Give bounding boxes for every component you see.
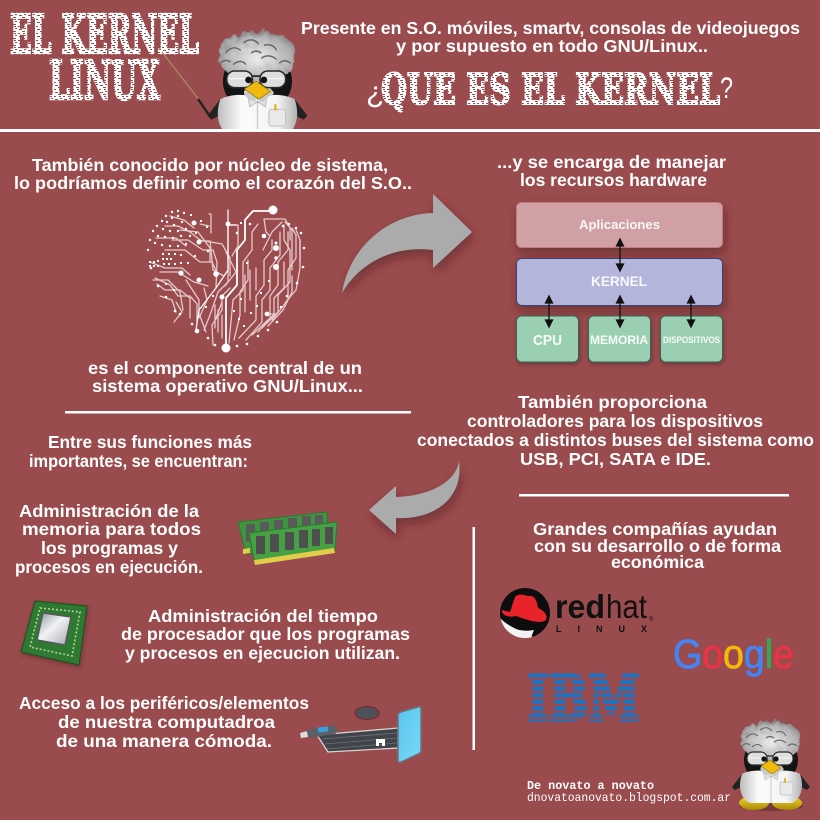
footer credit: De novato a novato bbox=[527, 779, 654, 793]
text: device drivers: También proporciona bbox=[518, 392, 707, 412]
box: aplicaciones: Aplicaciones bbox=[579, 217, 660, 232]
pointer stick bbox=[162, 52, 209, 115]
text: functions intro: importantes, se encuentran: bbox=[29, 451, 248, 471]
text: definition: También conocido por núcleo de sistema, bbox=[32, 155, 388, 175]
text: hardware: los recursos hardware bbox=[520, 170, 707, 190]
text: functions intro bbox=[29, 432, 252, 471]
text: device drivers bbox=[417, 392, 814, 469]
text: memory management bbox=[15, 501, 203, 577]
header: title bbox=[10, 4, 199, 112]
text: peripherals access: de nuestra computadroa bbox=[58, 712, 275, 732]
box: cpu: CPU bbox=[533, 332, 562, 349]
text: central component: es el componente central de un bbox=[88, 358, 362, 378]
text: peripherals access: de una manera cómoda. bbox=[56, 731, 272, 751]
text: processor time: y procesos en ejecucion utilizan. bbox=[125, 643, 400, 663]
icon: processor chip bbox=[21, 601, 87, 665]
logo: google: Google bbox=[673, 631, 794, 677]
box: dispositivos: DISPOSITIVOS bbox=[663, 335, 720, 345]
icon: footer penguin bbox=[732, 720, 810, 811]
text: central component: sistema operativo GNU/Linux... bbox=[92, 376, 363, 396]
text: device drivers: USB, PCI, SATA e IDE. bbox=[520, 449, 711, 469]
logo: red hat bbox=[500, 588, 654, 638]
icon: circuit heart bbox=[147, 206, 305, 352]
box: aplicaciones bbox=[516, 202, 722, 248]
text: processor time: de procesador que los programas bbox=[121, 624, 410, 644]
header intro text: y por supuesto en todo GNU/Linux.. bbox=[396, 36, 708, 56]
text: hardware bbox=[497, 152, 726, 190]
header intro text: Presente en S.O. móviles, smartv, consolas de videojuegos bbox=[301, 18, 800, 38]
text: processor time: Administración del tiempo bbox=[148, 606, 378, 626]
logo: red hat: hat bbox=[606, 588, 647, 625]
arrow: to functions bbox=[369, 461, 460, 534]
icon: teacher penguin bbox=[208, 28, 308, 129]
arrow: heart to hardware bbox=[342, 194, 472, 293]
logo: red hat: ® bbox=[649, 616, 654, 623]
text: memory management: memoria para todos bbox=[22, 519, 201, 539]
text: device drivers: controladores para los dispositivos bbox=[467, 411, 763, 431]
heading: que es el kernel: ¿ bbox=[366, 76, 384, 109]
text: memory management: Administración de la bbox=[19, 501, 199, 521]
box: kernel: KERNEL bbox=[591, 273, 647, 289]
header intro text bbox=[301, 18, 800, 56]
heading: que es el kernel: ? bbox=[720, 72, 733, 105]
logo: red hat: LINUX bbox=[556, 624, 647, 634]
logo: ibm: IBM bbox=[527, 662, 640, 735]
kernel layer diagram bbox=[516, 202, 722, 362]
box: memoria bbox=[588, 316, 650, 362]
text: companies: con su desarrollo o de forma bbox=[534, 536, 781, 556]
box: memoria: MEMORIA bbox=[590, 333, 648, 347]
box: dispositivos bbox=[660, 316, 722, 362]
text: central component bbox=[88, 358, 363, 396]
footer credit bbox=[527, 779, 731, 805]
text: functions intro: Entre sus funciones más bbox=[48, 432, 252, 452]
arrows: connections bbox=[546, 239, 694, 327]
text: peripherals access: Acceso a los periféricos/elementos bbox=[19, 693, 309, 713]
header: title: EL KERNEL bbox=[10, 4, 199, 66]
text: hardware: ...y se encarga de manejar bbox=[497, 152, 726, 172]
icon: peripherals bbox=[300, 706, 421, 762]
footer credit: dnovatoanovato.blogspot.com.ar bbox=[527, 791, 731, 805]
text: definition bbox=[14, 155, 412, 193]
text: memory management: procesos en ejecución. bbox=[15, 557, 203, 577]
icon: ram modules bbox=[238, 512, 337, 565]
text: processor time bbox=[121, 606, 410, 663]
text: companies: económica bbox=[611, 552, 704, 572]
text: peripherals access bbox=[19, 693, 309, 751]
text: companies bbox=[533, 519, 781, 572]
box: kernel bbox=[516, 258, 722, 306]
text: companies: Grandes compañías ayudan bbox=[533, 519, 777, 539]
box: cpu bbox=[516, 316, 578, 362]
text: device drivers: conectados a distintos buses del sistema como bbox=[417, 430, 814, 450]
text: memory management: los programas y bbox=[41, 538, 178, 558]
logo: red hat: red bbox=[555, 588, 605, 625]
header: title: LINUX bbox=[49, 50, 160, 112]
text: definition: lo podríamos definir como el corazón del S.O.. bbox=[14, 173, 412, 193]
